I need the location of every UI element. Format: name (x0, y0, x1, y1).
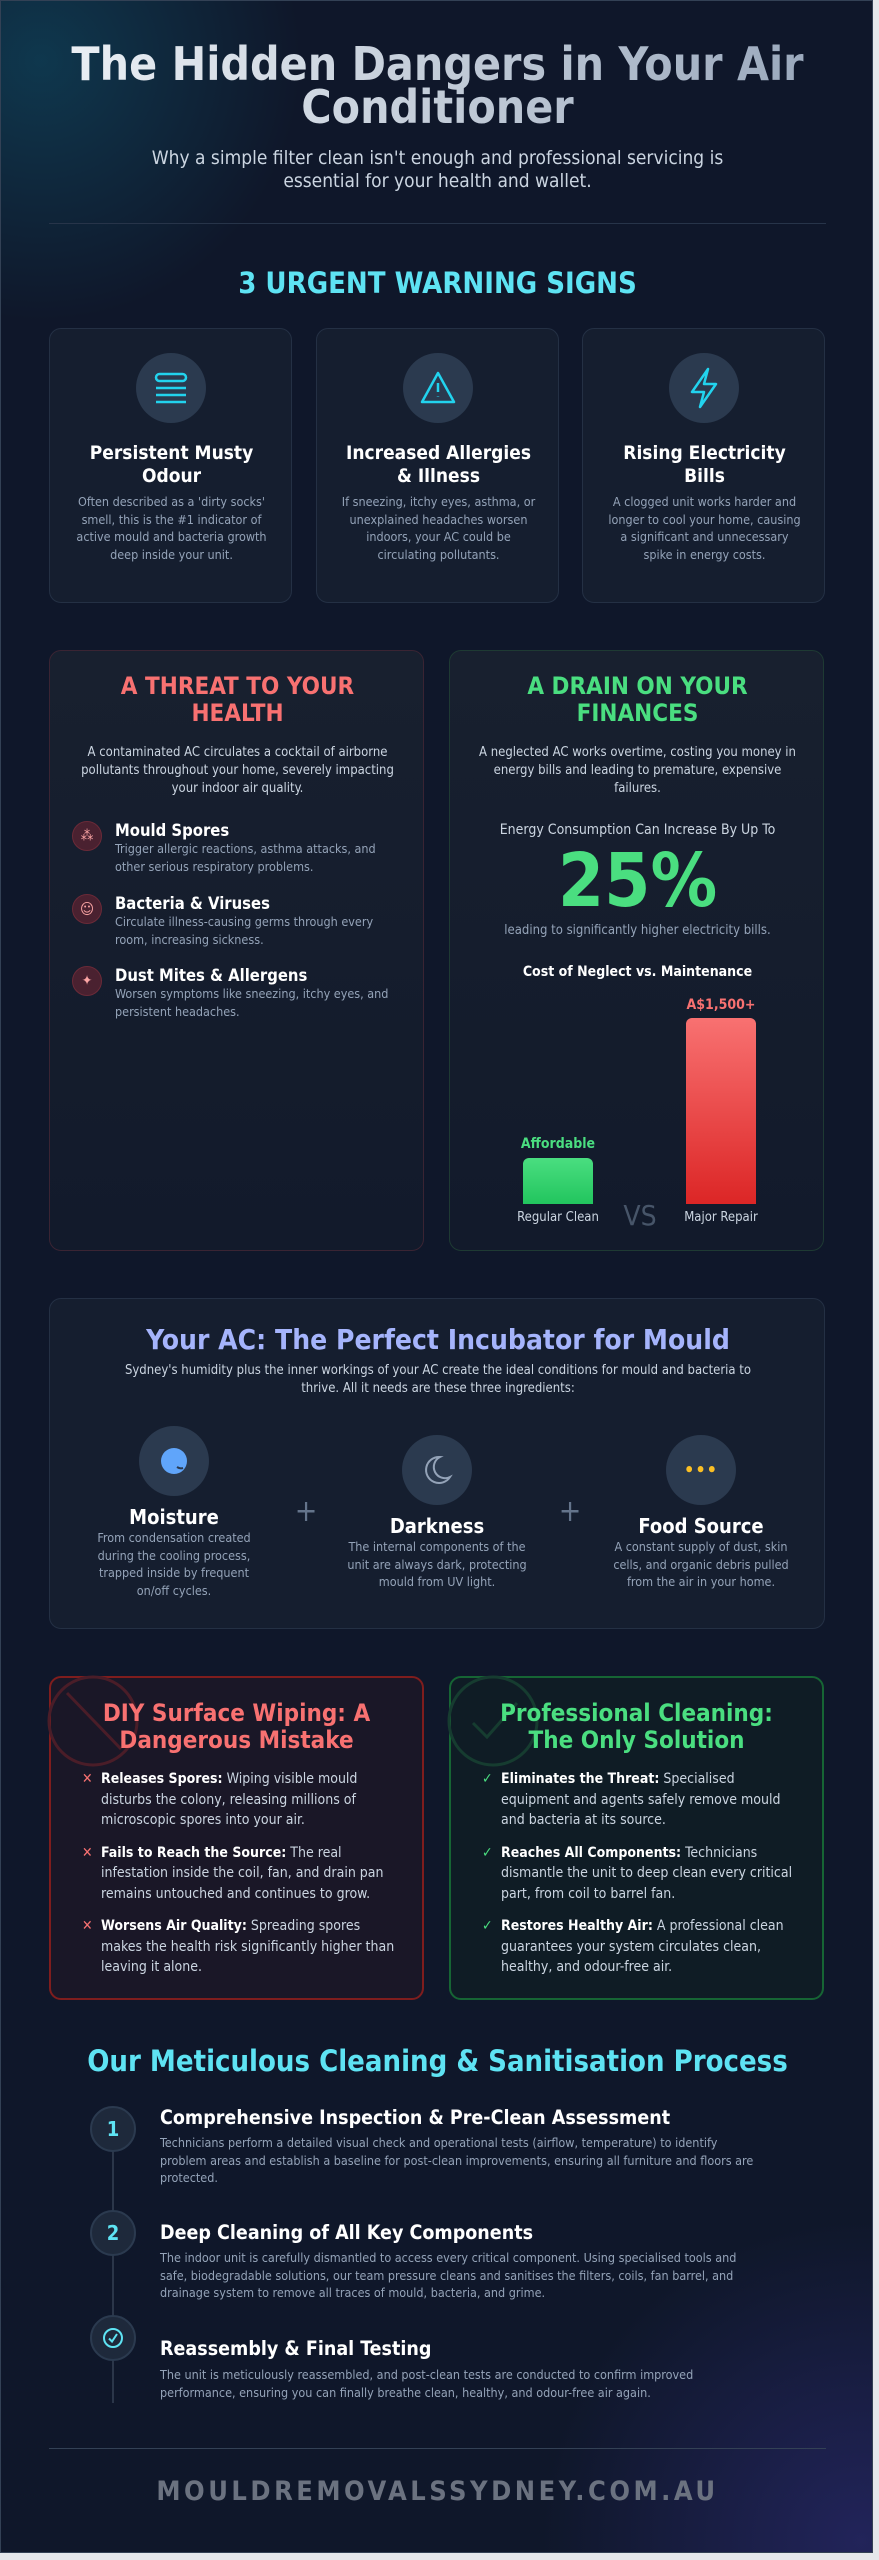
decorative check circle (448, 1676, 538, 1766)
icon: dots (666, 1435, 736, 1505)
heading: process: Our Meticulous Cleaning & Sanitisation Process (87, 2044, 788, 2078)
title (1, 43, 874, 129)
bar chart: VS (623, 1199, 657, 1232)
bar chart: Affordable (521, 1136, 595, 1152)
step 2: Deep Cleaning of All Key Components (160, 2221, 533, 2244)
item: bacteria (72, 894, 373, 947)
ingredient: moisture: From condensation created during the cooling process, trapped inside by frequent on/off cycles. (97, 1530, 251, 1598)
icon: moon (402, 1435, 472, 1505)
icon: sparkle (72, 966, 102, 996)
list: Fails to Reach the Source: The real infestation inside the coil, fan, and drain pan remains untouched and continues to grow. (101, 1844, 384, 1902)
step 1: Technicians perform a detailed visual check and operational tests (airflow, temperature) to identify problem areas and establish a baseline for post-clean improvements, ensuring all furniture and floors are protected. (160, 2135, 753, 2185)
heading: FINANCES (577, 699, 698, 727)
card title (90, 442, 253, 487)
list: Eliminates the Threat: Specialised equipment and agents safely remove mould and bacteria at its source. (501, 1771, 780, 1828)
heading: HEALTH (191, 699, 284, 727)
card title (346, 442, 531, 487)
stat label: Energy Consumption Can Increase By Up To (500, 822, 775, 838)
title: The Hidden Dangers in Your Air (71, 37, 804, 91)
heading: The Only Solution (528, 1726, 745, 1754)
icon: spores: ⁂ (81, 828, 93, 844)
heading: DIY Surface Wiping: A (103, 1699, 370, 1727)
step 2: The indoor unit is carefully dismantled to access every critical component. Using specialised tools and safe, biodegradable solutions, our team pressure cleans and sanitises the filters, coils, fan barrel, and drainage system to remove all traces of mould, bacteria, and grime. (160, 2250, 736, 2300)
step 3 (90, 2315, 693, 2400)
step number: 2 (107, 2221, 119, 2245)
heading (103, 1699, 370, 1754)
bar chart: A$1,500+ (687, 997, 755, 1013)
panel: finances (449, 650, 824, 1251)
list: Worsens Air Quality: Spreading spores makes the health risk significantly higher than leaving it alone. (101, 1918, 394, 1975)
card title: Rising Electricity (623, 442, 786, 464)
footer: website: MOULDREMOVALSSYDNEY.COM.AU (156, 2476, 719, 2507)
step number (90, 2210, 136, 2256)
card text: If sneezing, itchy eyes, asthma, or unexplained headaches worsen indoors, your AC could be circulating pollutants. (342, 494, 535, 562)
ingredient: darkness (347, 1435, 527, 1589)
card: musty odour (49, 328, 292, 603)
card title: Odour (142, 465, 201, 487)
intro text: A neglected AC works overtime, costing you money in energy bills and leading to premature, expensive failures. (479, 745, 796, 796)
item: mould spores (72, 821, 376, 874)
plus sign: + (295, 1494, 317, 1529)
card: allergies (316, 328, 559, 603)
step 3: Reassembly & Final Testing (160, 2337, 431, 2360)
icon: face: ☺ (80, 900, 94, 918)
step 3: The unit is meticulously reassembled, and post-clean tests are conducted to confirm improved performance, ensuring you can finally breathe clean, healthy, and odour-free air again. (160, 2367, 693, 2400)
step number (90, 2106, 136, 2152)
plus sign: + (559, 1494, 581, 1529)
card title: Bills (684, 465, 725, 487)
ingredient: food source: Food Source (638, 1514, 764, 1538)
heading: A DRAIN ON YOUR (527, 672, 748, 700)
ingredient: darkness: Darkness (390, 1514, 484, 1538)
item: bacteria: Bacteria & Viruses (115, 894, 270, 913)
title: Conditioner (301, 80, 574, 134)
description: Sydney's humidity plus the inner workings of your AC create the ideal conditions for mould and bacteria to thrive. All it needs are these three ingredients: (125, 1363, 751, 1396)
list: Restores Healthy Air: A professional clean guarantees your system circulates clean, healthy, and odour-free air. (501, 1918, 784, 1975)
stat: 25%: 25% (558, 838, 717, 924)
item: bacteria: Circulate illness-causing germs through every room, increasing sickness. (115, 914, 373, 947)
step 1 (90, 2106, 753, 2185)
card text: Often described as a 'dirty socks' smell, this is the #1 indicator of active mould and bacteria growth deep inside your unit. (76, 494, 267, 562)
panel: health threat (49, 650, 424, 1251)
card title (623, 442, 786, 487)
ingredient: moisture: Moisture (129, 1505, 219, 1529)
list (482, 1771, 792, 1975)
bar chart (517, 997, 758, 1232)
list: ✕ (82, 1844, 93, 1860)
stat caption: leading to significantly higher electricity bills. (504, 923, 771, 938)
card: electricity (582, 328, 825, 603)
heading: Dangerous Mistake (119, 1726, 354, 1754)
item: mould spores: Trigger allergic reactions, asthma attacks, and other serious respiratory problems. (115, 841, 376, 874)
item: mould spores: Mould Spores (115, 821, 229, 840)
list: Releases Spores: Wiping visible mould disturbs the colony, releasing millions of microscopic spores into your air. (101, 1771, 357, 1828)
intro text: A contaminated AC circulates a cocktail of airborne pollutants throughout your home, severely impacting your indoor air quality. (81, 745, 394, 796)
card text: A clogged unit works harder and longer to cool your home, causing a significant and unnecessary spike in energy costs. (608, 494, 801, 562)
icon: filter lines (136, 353, 206, 423)
item: dust mites: Worsen symptoms like sneezing, itchy eyes, and persistent headaches. (115, 986, 388, 1019)
icon: lightning (669, 353, 739, 423)
chart title: Cost of Neglect vs. Maintenance (523, 964, 752, 980)
list: ✕ (82, 1918, 93, 1934)
icon: check (90, 2315, 136, 2361)
list: ✓ (482, 1844, 493, 1860)
heading: Professional Cleaning: (500, 1699, 773, 1727)
ingredient: moisture (97, 1426, 251, 1598)
item: dust mites (72, 966, 388, 1019)
panel: DIY mistake (49, 1676, 424, 2000)
panel: incubator (49, 1298, 825, 1629)
panel: professional cleaning (449, 1676, 824, 2000)
step number: 1 (107, 2117, 119, 2141)
icon: spores (72, 821, 102, 851)
ingredient: food source: A constant supply of dust, skin cells, and organic debris pulled from the air in your home. (613, 1539, 789, 1589)
ingredient: food source (613, 1435, 789, 1589)
step 1: Comprehensive Inspection & Pre-Clean Assessment (160, 2106, 670, 2129)
list: Reaches All Components: Technicians dismantle the unit to deep clean every critical part, from coil to barrel fan. (501, 1844, 792, 1902)
list: ✕ (82, 1771, 93, 1787)
icon: sparkle: ✦ (82, 973, 92, 989)
card title: Increased Allergies (346, 442, 531, 464)
heading: warning signs: 3 URGENT WARNING SIGNS (238, 266, 637, 300)
list: ✓ (482, 1918, 493, 1934)
icon: water drop (139, 1426, 209, 1496)
card title: Persistent Musty (90, 442, 253, 464)
heading: Your AC: The Perfect Incubator for Mould (146, 1323, 730, 1356)
bar chart: Regular Clean (517, 1210, 599, 1225)
heading (527, 672, 748, 727)
item: dust mites: Dust Mites & Allergens (115, 966, 307, 985)
icon: dots: ••• (684, 1460, 718, 1480)
heading: A THREAT TO YOUR (121, 672, 354, 700)
ingredient: darkness: The internal components of the unit are always dark, protecting mould from UV light. (347, 1539, 527, 1589)
bar chart: Major Repair (684, 1210, 758, 1225)
heading (500, 1699, 773, 1754)
decorative x circle (48, 1676, 138, 1766)
icon: face (72, 894, 102, 924)
subtitle: Why a simple filter clean isn't enough and professional servicing is essential for your health and wallet. (152, 147, 723, 192)
timeline line (112, 2141, 114, 2403)
list: ✓ (482, 1771, 493, 1787)
step 2 (90, 2210, 736, 2300)
card title: & Illness (397, 465, 480, 487)
heading (120, 672, 354, 727)
list (82, 1771, 394, 1975)
icon: warning (403, 353, 473, 423)
